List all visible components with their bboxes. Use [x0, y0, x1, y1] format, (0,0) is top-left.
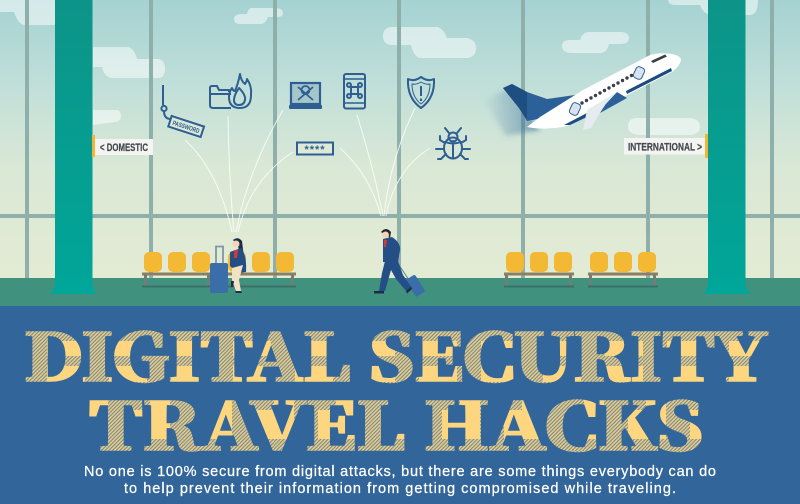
icon: password field — [297, 142, 333, 156]
plane — [503, 53, 681, 130]
suitcase — [216, 246, 223, 263]
icon: phishing hook with password tag — [161, 85, 204, 137]
jacket — [230, 248, 246, 273]
sign: international: INTERNATIONAL > — [628, 142, 702, 154]
plane belly stripe — [564, 68, 672, 125]
title panel background — [0, 306, 800, 504]
hair — [233, 238, 244, 258]
pillar: right — [704, 0, 750, 294]
rolling suitcase — [399, 265, 409, 280]
intro line 1: No one is 100% secure from digital attacks, but there are some things everybody can do — [84, 464, 716, 480]
sign: domestic — [92, 135, 153, 157]
icon: phishing hook with password tag: PASSWORD — [171, 120, 200, 135]
legs — [232, 265, 243, 291]
window frames — [0, 0, 800, 279]
legs — [379, 261, 412, 292]
intro line 2: to help prevent their information from getting compromised while traveling. — [124, 481, 676, 497]
clouds — [0, 0, 758, 135]
seats: right row 2 — [588, 252, 658, 288]
icon: bug — [436, 128, 470, 159]
suit — [383, 237, 400, 262]
seat behind woman — [228, 252, 246, 272]
intro text — [84, 464, 716, 497]
connector curves — [185, 108, 430, 232]
seats: left row — [142, 252, 296, 288]
sign: international — [624, 134, 708, 158]
icon: laptop with skull — [289, 83, 322, 109]
head — [382, 232, 389, 238]
businessman walking with suitcase — [374, 229, 425, 297]
plane motion blur — [483, 87, 540, 136]
pillar: left — [51, 0, 96, 294]
hair — [381, 229, 391, 238]
plane tail fin — [503, 84, 575, 121]
plane wing — [600, 92, 627, 113]
title line 2: TRAVEL HACKS — [89, 376, 703, 468]
seats: right row 1 — [504, 252, 574, 288]
icon: folder on fire — [210, 74, 251, 108]
icon: warning shield — [408, 77, 434, 108]
sign: domestic: < DOMESTIC — [100, 142, 148, 154]
title line 1: DIGITAL SECURITY — [24, 308, 768, 400]
woman seated with suitcase — [210, 238, 246, 293]
plane fuselage — [527, 53, 681, 129]
window sky background — [0, 0, 800, 280]
head — [232, 240, 240, 248]
icon: phone with network — [344, 74, 365, 108]
floor — [0, 278, 800, 306]
icon: password field: **** — [304, 144, 326, 156]
plane windows — [580, 54, 667, 105]
title — [24, 308, 768, 468]
plane doors — [568, 102, 582, 116]
